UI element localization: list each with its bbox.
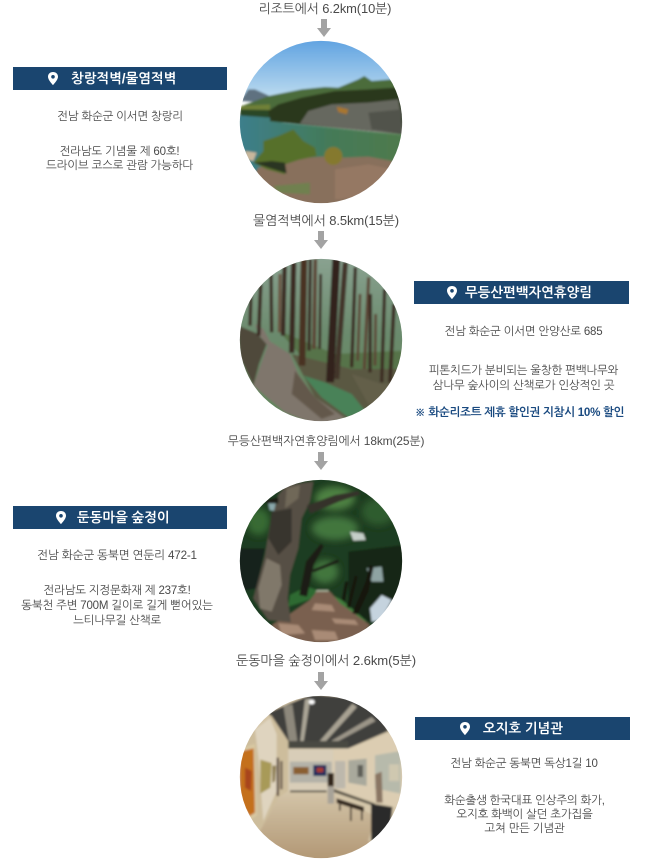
icon: pin bbox=[447, 286, 457, 299]
panel: Oh Ji-ho memorial bbox=[415, 717, 630, 740]
description 2 bbox=[429, 364, 618, 392]
description 4 bbox=[444, 794, 605, 835]
heading: 무등산편백자연휴양림 bbox=[465, 285, 592, 300]
icon: pin bbox=[460, 722, 470, 735]
arrow 3 bbox=[314, 452, 328, 470]
route label: from forest: 무등산편백자연휴양림에서 18km(25분) bbox=[228, 434, 424, 448]
heading: 둔동마을 숲정이 bbox=[77, 510, 170, 525]
description 4: 화순출생 한국대표 인상주의 화가, bbox=[444, 795, 605, 807]
icon: pin bbox=[56, 511, 66, 524]
arrow 4 bbox=[314, 672, 328, 690]
description 1: 전라남도 기념물 제 60호! bbox=[60, 146, 179, 158]
photo: zelkova tree walk bbox=[240, 480, 402, 642]
heading: 창랑적벽/물염적벽 bbox=[71, 71, 176, 86]
address 2: 전남 화순군 이서면 안양산로 685 bbox=[445, 326, 602, 338]
photos bbox=[240, 40, 402, 858]
photo: cypress forest bbox=[240, 258, 402, 422]
discount note: ※ 화순리조트 제휴 할인권 지참시 10% 할인 bbox=[415, 406, 624, 419]
photo: gallery interior bbox=[240, 696, 402, 858]
icon: pin bbox=[48, 72, 58, 85]
address 3: 전남 화순군 동북면 연둔리 472-1 bbox=[37, 549, 197, 562]
description 3: 동북천 주변 700M 길이로 길게 뻗어있는 bbox=[21, 600, 213, 612]
description 4: 오지호 화백이 살던 초가집을 bbox=[456, 809, 593, 821]
arrow 1 bbox=[317, 19, 331, 37]
description 1: 드라이브 코스로 관람 가능하다 bbox=[46, 160, 193, 172]
description 2: 삼나무 숲사이의 산책로가 인상적인 곳 bbox=[433, 380, 614, 392]
description 1 bbox=[46, 146, 193, 172]
panel: Mudeungsan cypress forest bbox=[414, 281, 629, 304]
panel: Changnang cliff bbox=[13, 67, 227, 90]
description 3: 느티나무길 산책로 bbox=[73, 615, 161, 627]
address 4: 전남 화순군 동북면 독상1길 10 bbox=[450, 758, 598, 770]
panel: Dundong village bbox=[13, 506, 227, 529]
description 2: 피톤치드가 분비되는 울창한 편백나무와 bbox=[429, 365, 618, 377]
route label: from resort: 리조트에서 6.2km(10분) bbox=[259, 1, 391, 16]
address 1: 전남 화순군 이서면 창랑리 bbox=[57, 111, 183, 123]
description 3: 전라남도 지정문화재 제 237호! bbox=[43, 585, 191, 597]
heading: 오지호 기념관 bbox=[483, 721, 563, 736]
route label: from Dundong: 둔동마을 숲정이에서 2.6km(5분) bbox=[236, 653, 416, 668]
photo: lake and cliffs bbox=[240, 40, 402, 204]
description 3 bbox=[21, 584, 213, 627]
route label: from Mulyeom: 물염적벽에서 8.5km(15분) bbox=[253, 213, 399, 228]
arrow 2 bbox=[314, 231, 328, 249]
description 4: 고쳐 만든 기념관 bbox=[484, 823, 565, 835]
